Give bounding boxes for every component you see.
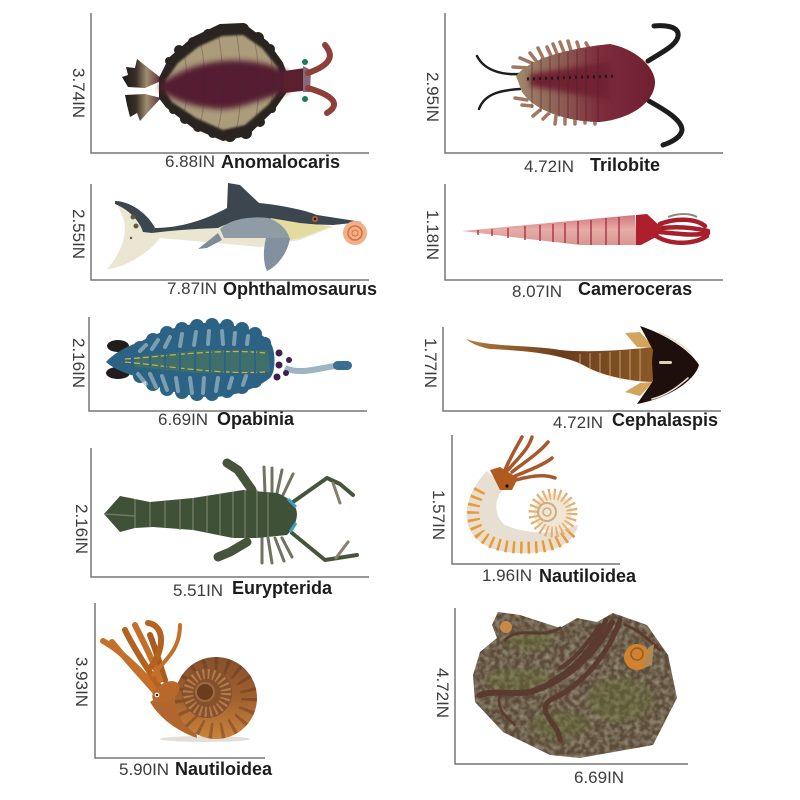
icon: large Nautiloidea figure: [103, 623, 257, 742]
height label: 2.16IN: [72, 504, 91, 554]
panel: rock base: [433, 608, 688, 787]
name label: Nautiloidea: [539, 566, 637, 586]
height label: 2.16IN: [69, 338, 88, 388]
panel: Cephalaspis: [421, 326, 721, 432]
icon: Opabinia figure: [106, 318, 352, 401]
icon: Eurypterida figure: [104, 463, 357, 563]
name label: Cameroceras: [578, 279, 692, 299]
height label: 4.72IN: [433, 668, 452, 718]
name label: Trilobite: [590, 155, 660, 175]
width label: 8.07IN: [512, 282, 562, 301]
height label: 2.95IN: [423, 72, 442, 122]
panel: Cameroceras: [423, 184, 723, 301]
panel: Trilobite: [423, 13, 723, 176]
width label: 5.90IN: [119, 760, 169, 779]
width label: 4.72IN: [553, 413, 603, 432]
height label: 2.55IN: [69, 209, 88, 259]
panel: Nautiloidea small: [429, 435, 637, 586]
icon: Trilobite figure: [477, 26, 682, 145]
panel: Opabinia: [69, 317, 367, 429]
icon: rock with roots and snails: [473, 612, 677, 758]
height label: 1.77IN: [421, 338, 440, 388]
icon: Cameroceras figure: [462, 214, 708, 245]
name label: Cephalaspis: [612, 410, 718, 430]
icon: Cephalaspis figure: [466, 326, 699, 404]
name label: Anomalocaris: [221, 152, 340, 172]
name label: Nautiloidea: [175, 759, 273, 779]
panel: Eurypterida: [72, 448, 369, 600]
width label: 7.87IN: [167, 279, 217, 298]
panel: Nautiloidea large: [72, 603, 273, 779]
name label: Ophthalmosaurus: [223, 279, 377, 299]
height label: 1.18IN: [423, 210, 442, 260]
panel: Ophthalmosaurus: [69, 183, 377, 299]
icon: Anomalocaris figure: [122, 23, 334, 142]
name label: Eurypterida: [232, 578, 333, 598]
width label: 6.69IN: [574, 768, 624, 787]
width label: 6.69IN: [158, 410, 208, 429]
width label: 5.51IN: [173, 581, 223, 600]
width label: 6.88IN: [165, 152, 215, 171]
height label: 3.74IN: [69, 68, 88, 118]
icon: small Nautiloidea figure: [467, 437, 578, 553]
width label: 1.96IN: [482, 566, 532, 585]
name label: Opabinia: [217, 409, 295, 429]
panel: Anomalocaris: [69, 13, 369, 172]
height label: 1.57IN: [429, 490, 448, 540]
width label: 4.72IN: [524, 157, 574, 176]
height label: 3.93IN: [72, 657, 91, 707]
icon: Ophthalmosaurus figure: [107, 183, 367, 271]
